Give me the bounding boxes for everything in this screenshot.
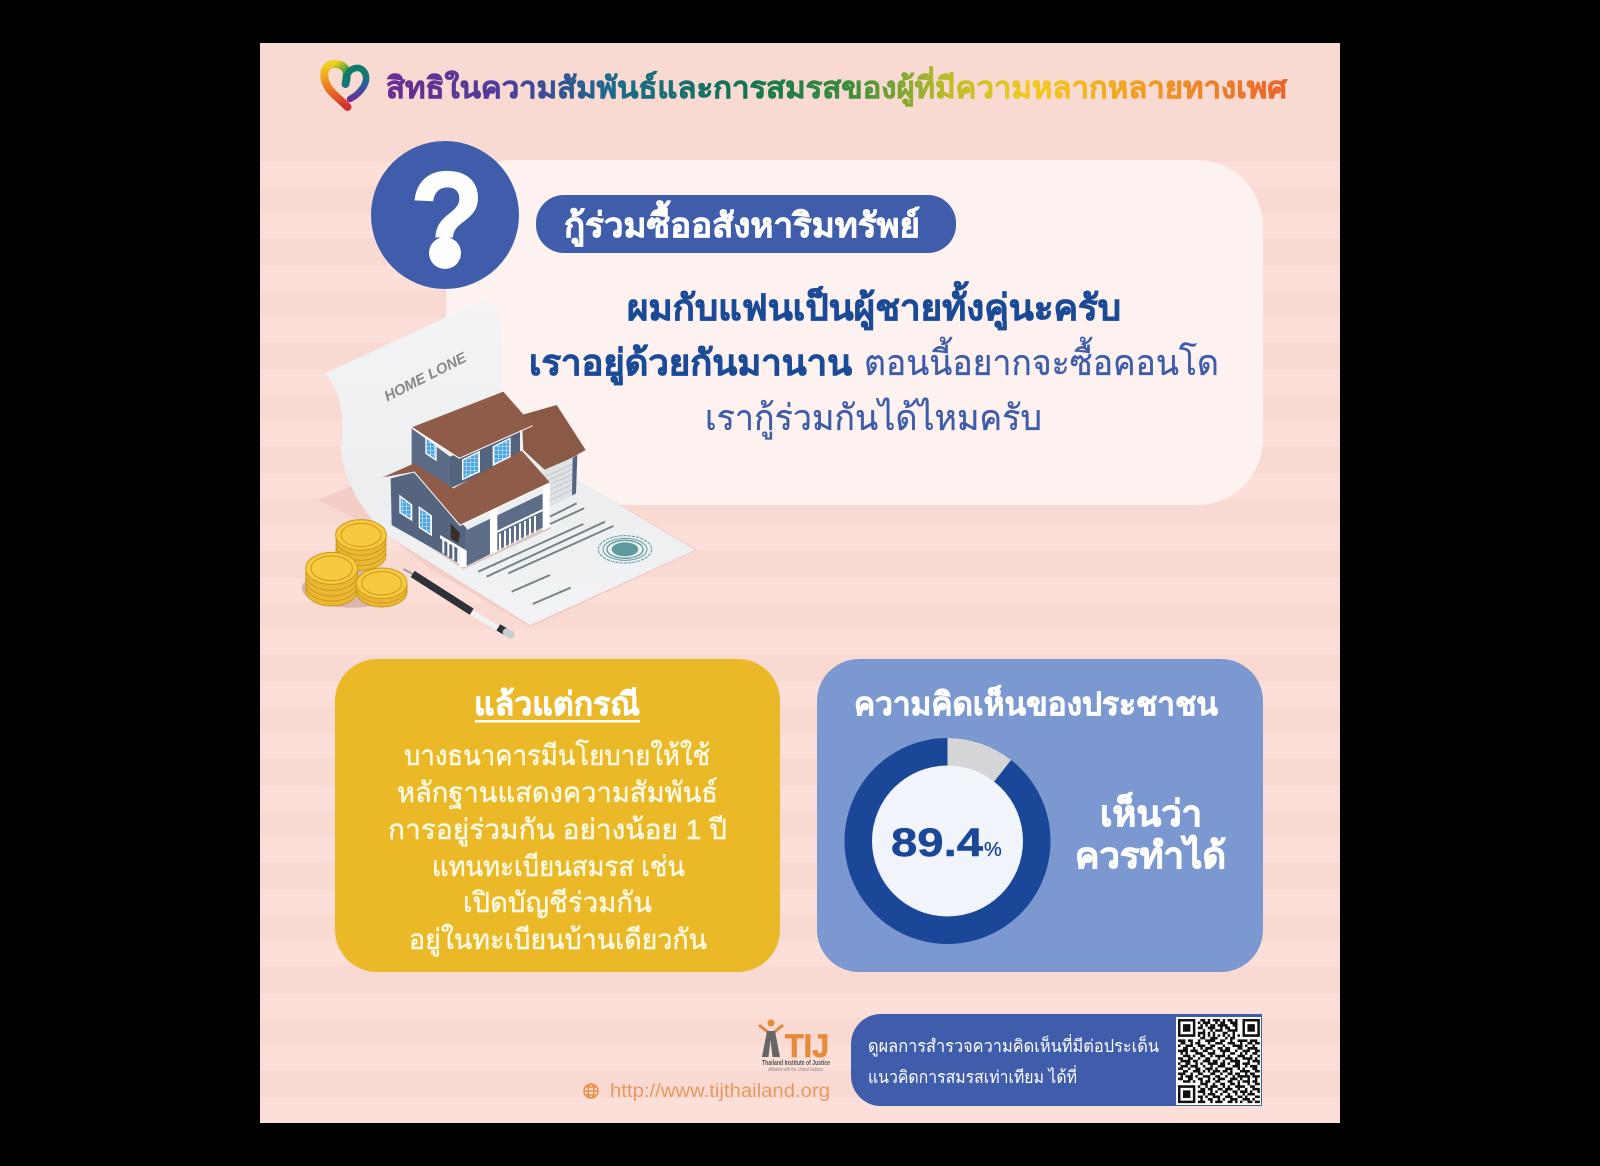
document lines bbox=[478, 503, 613, 604]
donut chart 89.4%: % bbox=[984, 839, 1002, 861]
icon: question mark bbox=[371, 141, 519, 292]
verdict text: ควรทำได้ bbox=[1075, 834, 1226, 876]
title with rainbow heart logo bbox=[324, 64, 1288, 107]
question text: ตอนนี้อยากจะซื้อคอนโด bbox=[864, 336, 1219, 383]
topic pill: กู้ร่วมซื้ออสังหาริมทรัพย์ bbox=[564, 200, 920, 247]
donut chart 89.4% bbox=[844, 738, 1050, 944]
icon: figure bbox=[759, 1020, 783, 1057]
survey text bbox=[868, 1034, 1159, 1087]
stamp bbox=[598, 536, 652, 563]
panel: case by case bbox=[335, 659, 780, 972]
body text: บางธนาคารมีนโยบายให้ใช้ bbox=[404, 739, 710, 771]
TIJ logo: TIJ bbox=[785, 1028, 829, 1064]
panel: public opinion bbox=[817, 659, 1263, 972]
donut chart 89.4%: 89.4 bbox=[891, 821, 984, 865]
pen bbox=[404, 569, 511, 635]
shadow bbox=[318, 480, 697, 627]
heading: public opinion: ความคิดเห็นของประชาชน bbox=[854, 684, 1218, 722]
TIJ logo: affiliated with the United Nations bbox=[768, 1067, 823, 1073]
heading: case by case: แล้วแต่กรณี bbox=[474, 686, 640, 722]
body text: การอยู่ร่วมกัน อย่างน้อย 1 ปี bbox=[388, 814, 727, 847]
body text: เปิดบัญชีร่วมกัน bbox=[463, 887, 652, 918]
house bbox=[383, 392, 586, 569]
home lone label: HOME LONE bbox=[382, 350, 470, 405]
website link: http://www.tijthailand.org bbox=[610, 1081, 830, 1102]
coins bbox=[302, 520, 407, 608]
TIJ logo: Thailand Institute of Justice bbox=[762, 1060, 830, 1067]
survey text: แนวคิดการสมรสเท่าเทียม ได้ที่ bbox=[868, 1065, 1077, 1087]
body text: แทนทะเบียนสมรส เช่น bbox=[432, 851, 685, 882]
icon: rainbow heart bbox=[324, 64, 366, 107]
question panel background bbox=[446, 160, 1263, 505]
QR code bbox=[1176, 1017, 1261, 1105]
TIJ logo bbox=[759, 1020, 830, 1073]
survey link box bbox=[851, 1014, 1262, 1106]
verdict text: เห็นว่า bbox=[1100, 791, 1202, 834]
body text: หลักฐานแสดงความสัมพันธ์ bbox=[397, 777, 718, 809]
body text: อยู่ในทะเบียนบ้านเดียวกัน bbox=[409, 923, 707, 957]
illustration: house on loan document with coins and pen bbox=[302, 299, 697, 635]
heading: title: สิทธิในความสัมพันธ์และการสมรสของผู้ที่มีความหลากหลายทางเพศ bbox=[386, 66, 1288, 107]
verdict text bbox=[1075, 791, 1226, 876]
question text: เรากู้ร่วมกันได้ไหมครับ bbox=[705, 397, 1042, 440]
question text: ผมกับแฟนเป็นผู้ชายทั้งคู่นะครับ bbox=[627, 281, 1121, 331]
survey text: ดูผลการสำรวจความคิดเห็นที่มีต่อประเด็น bbox=[868, 1034, 1159, 1057]
icon: globe bbox=[584, 1084, 598, 1098]
topic pill bbox=[536, 195, 956, 253]
loan document bbox=[325, 299, 695, 625]
body text bbox=[388, 739, 727, 957]
panel: question bbox=[371, 141, 1263, 505]
question text: เราอยู่ด้วยกันมานาน bbox=[529, 342, 852, 386]
icon: question mark: ? bbox=[410, 145, 484, 292]
question text bbox=[529, 281, 1219, 440]
page background bbox=[260, 43, 1340, 1123]
